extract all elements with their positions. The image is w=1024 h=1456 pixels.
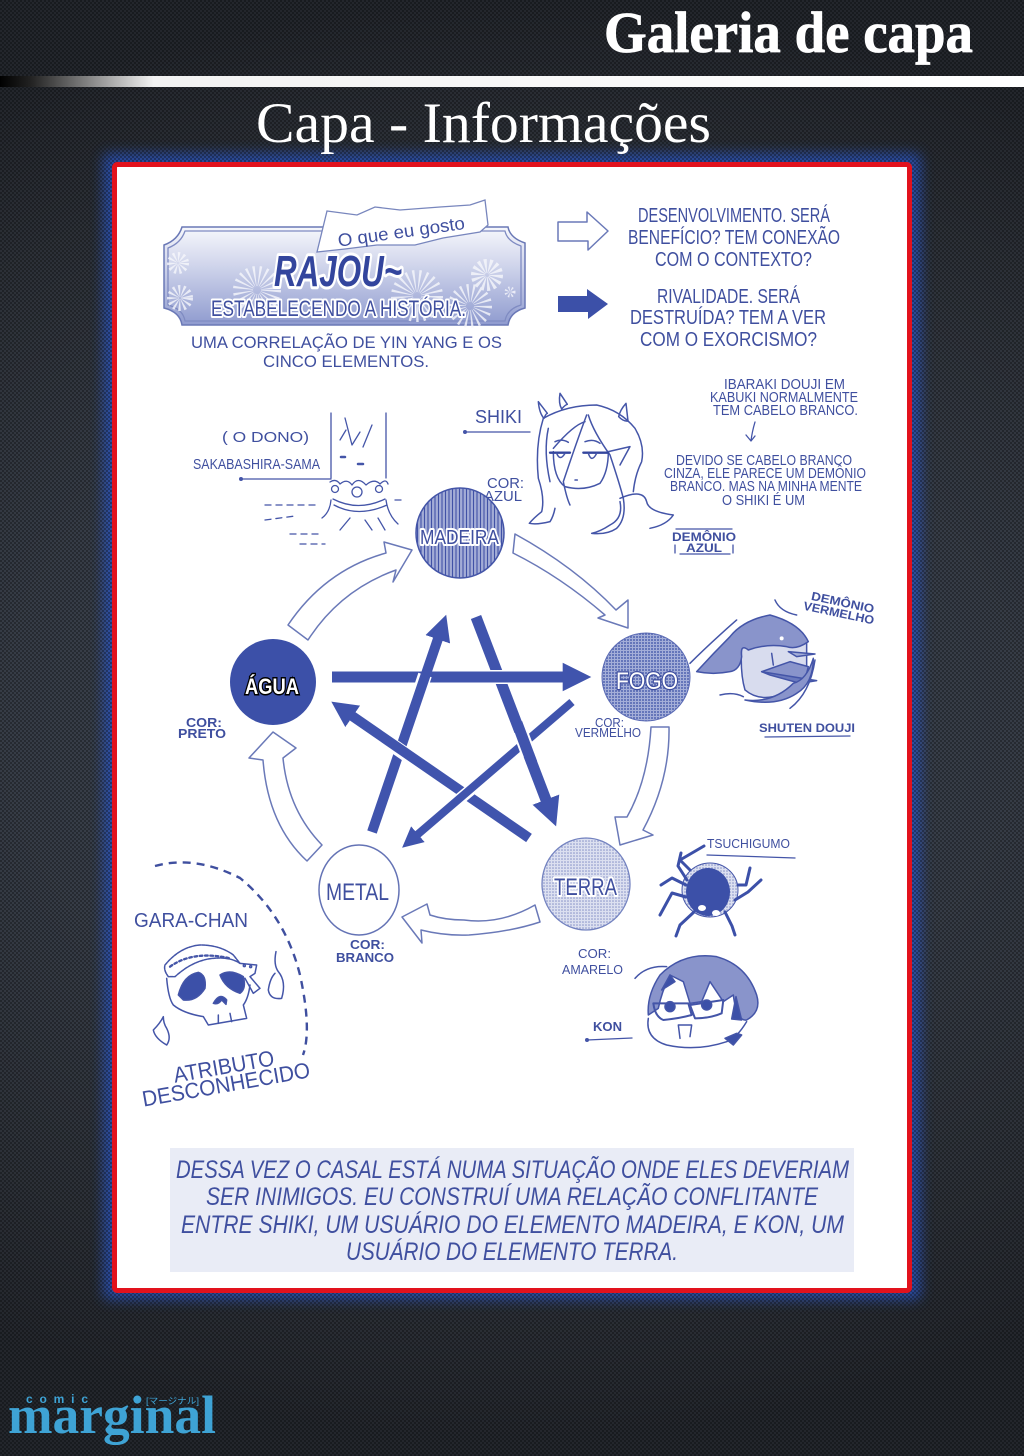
cycle arrow: terra to metal — [402, 904, 540, 943]
text: rivalidade: DESTRUÍDA? TEM A VER — [630, 306, 826, 329]
label: Shiki — [463, 407, 530, 434]
label: cor preto — [178, 715, 226, 741]
note: Ibaraki Douji — [664, 376, 866, 509]
closing text box: USUÁRIO DO ELEMENTO TERRA. — [346, 1237, 678, 1266]
icon: Shiki head — [529, 393, 673, 534]
node: Terra — [542, 838, 630, 930]
node: Fogo — [602, 633, 690, 721]
label: cor vermelho: VERMELHO — [575, 725, 641, 740]
note: Ibaraki Douji: TEM CABELO BRANCO. — [713, 402, 858, 419]
note: Ibaraki Douji: KABUKI NORMALMENTE — [710, 389, 858, 406]
label: cor azul: COR: — [487, 475, 524, 492]
heading: Capa - Informações: Capa - Informações — [256, 92, 711, 155]
node: Madeira — [416, 488, 504, 578]
header divider bar — [0, 76, 1024, 87]
arrow: água to fogo — [332, 670, 577, 684]
panel: white page with red border — [114, 164, 910, 1290]
label: demônio vermelho: VERMELHO — [802, 599, 876, 627]
note: Ibaraki Douji: BRANCO. MAS NA MINHA MENTE — [670, 478, 862, 495]
caption: yin yang: UMA CORRELAÇÃO DE YIN YANG E OS — [191, 333, 502, 352]
text: desenvolvimento: BENEFÍCIO? TEM CONEXÃO — [628, 225, 840, 249]
label: Tsuchigumo: TSUCHIGUMO — [707, 836, 790, 851]
label: Kon — [585, 1019, 632, 1042]
label: Sakabashira-sama: SAKABASHIRA-SAMA — [193, 456, 320, 473]
label: cor branco — [336, 937, 394, 965]
arrow: madeira to terra — [476, 617, 551, 813]
note: Ibaraki Douji: CINZA, ELE PARECE UM DEMÔNIO — [664, 465, 866, 482]
fireworks — [172, 257, 513, 319]
label: demônio azul: DEMÔNIO — [672, 529, 736, 544]
arrow: madeira to terra overlap — [517, 723, 532, 763]
label: Shiki: SHIKI — [475, 407, 522, 427]
label: Kon: KON — [593, 1019, 622, 1034]
banner frame — [164, 227, 525, 325]
label: cor branco: BRANCO — [336, 950, 394, 965]
caption: yin yang — [191, 333, 502, 371]
note: Ibaraki Douji: O SHIKI É UM — [722, 492, 805, 509]
label: demônio vermelho — [802, 588, 876, 627]
closing text box — [170, 1148, 854, 1272]
label: cor azul — [484, 475, 524, 505]
icon: sacred tree — [265, 413, 402, 544]
banner: Rajou — [164, 200, 525, 325]
label: atributo desconhecido: ATRIBUTO — [171, 1045, 276, 1088]
cycle arrow: fogo to terra — [615, 727, 669, 845]
icon: hollow arrow — [558, 212, 608, 250]
icon: Kon head — [635, 956, 758, 1048]
title: Galeria de capa: Galeria de capa — [604, 0, 973, 65]
label: Sakabashira-sama: ( O DONO) — [222, 429, 309, 446]
closing text box: DESSA VEZ O CASAL ESTÁ NUMA SITUAÇÃO ONDE ELES DEVERIAM — [176, 1155, 849, 1184]
text: rivalidade: COM O EXORCISMO? — [640, 329, 817, 351]
node: Metal — [319, 845, 399, 935]
caption: yin yang: CINCO ELEMENTOS. — [263, 352, 429, 371]
subtitle: ESTABELECENDO A HISTÓRIA. — [211, 296, 466, 321]
label: Tsuchigumo — [707, 836, 795, 858]
tag: O que eu gosto — [317, 200, 488, 252]
cycle arrow: água to madeira — [288, 542, 412, 640]
text: rivalidade — [630, 285, 826, 351]
logo: comic marginal: [マージナル] — [146, 1396, 199, 1406]
label: cor amarelo: COR: — [578, 946, 611, 961]
icon: skull with wisps — [153, 945, 284, 1045]
node: Metal: METAL — [326, 879, 389, 906]
label: cor preto: COR: — [186, 715, 222, 730]
node: Água: ÁGUA — [245, 674, 299, 699]
text: desenvolvimento: COM O CONTEXTO? — [655, 249, 812, 271]
closing text box: SER INIMIGOS. EU CONSTRUÍ UMA RELAÇÃO CONFLITANTE — [206, 1182, 818, 1211]
label: Sakabashira-sama — [193, 429, 331, 481]
tag: O que eu gosto: O que eu gosto — [336, 213, 466, 251]
closing text box: ENTRE SHIKI, UM USUÁRIO DO ELEMENTO MADEIRA, E KON, UM — [181, 1210, 844, 1239]
arrow: fogo to metal — [410, 702, 572, 841]
label: cor branco: COR: — [350, 937, 385, 952]
icon: solid arrow — [558, 289, 608, 319]
cycle arrow: madeira to fogo — [513, 534, 628, 628]
unknown attribute dashed boundary — [155, 862, 307, 1055]
label: demônio azul — [672, 529, 736, 555]
label: cor preto: PRETO — [178, 726, 226, 741]
label: Shuten Douji: SHUTEN DOUJI — [759, 721, 855, 735]
note: Ibaraki Douji: DEVIDO SE CABELO BRANCO — [676, 452, 852, 469]
text: desenvolvimento: DESENVOLVIMENTO. SERÁ — [638, 204, 830, 227]
logo: comic marginal: comic — [26, 1392, 88, 1406]
pentagram arrows — [332, 617, 577, 841]
cycle arrow: metal to água — [249, 732, 322, 861]
arrow: metal to madeira — [372, 627, 442, 832]
label: cor vermelho: COR: — [595, 715, 624, 730]
node: Terra: TERRA — [554, 874, 617, 901]
RAJOU title: RAJOU~ — [274, 247, 402, 296]
arrow: terra to água — [342, 709, 529, 838]
node: Madeira: MADEIRA — [420, 527, 500, 549]
text: rivalidade: RIVALIDADE. SERÁ — [657, 285, 801, 308]
node: Fogo: FOGO — [616, 668, 678, 695]
label: atributo desconhecido: DESCONHECIDO — [140, 1057, 312, 1112]
logo: comic marginal: marginal — [8, 1385, 216, 1445]
label: cor azul: AZUL — [484, 488, 522, 505]
node: Água — [230, 639, 316, 725]
icon: spider — [660, 846, 761, 936]
label: Gara-chan: GARA-CHAN — [134, 910, 248, 932]
icon: Shuten Douji head — [690, 600, 817, 708]
label: cor amarelo — [562, 946, 623, 977]
label: demônio azul: AZUL — [686, 541, 722, 555]
label: cor vermelho — [575, 715, 641, 740]
text: desenvolvimento — [628, 204, 840, 271]
note: Ibaraki Douji: IBARAKI DOUJI EM — [724, 376, 845, 393]
label: demônio vermelho: DEMÔNIO — [810, 588, 876, 616]
label: cor amarelo: AMARELO — [562, 962, 623, 977]
